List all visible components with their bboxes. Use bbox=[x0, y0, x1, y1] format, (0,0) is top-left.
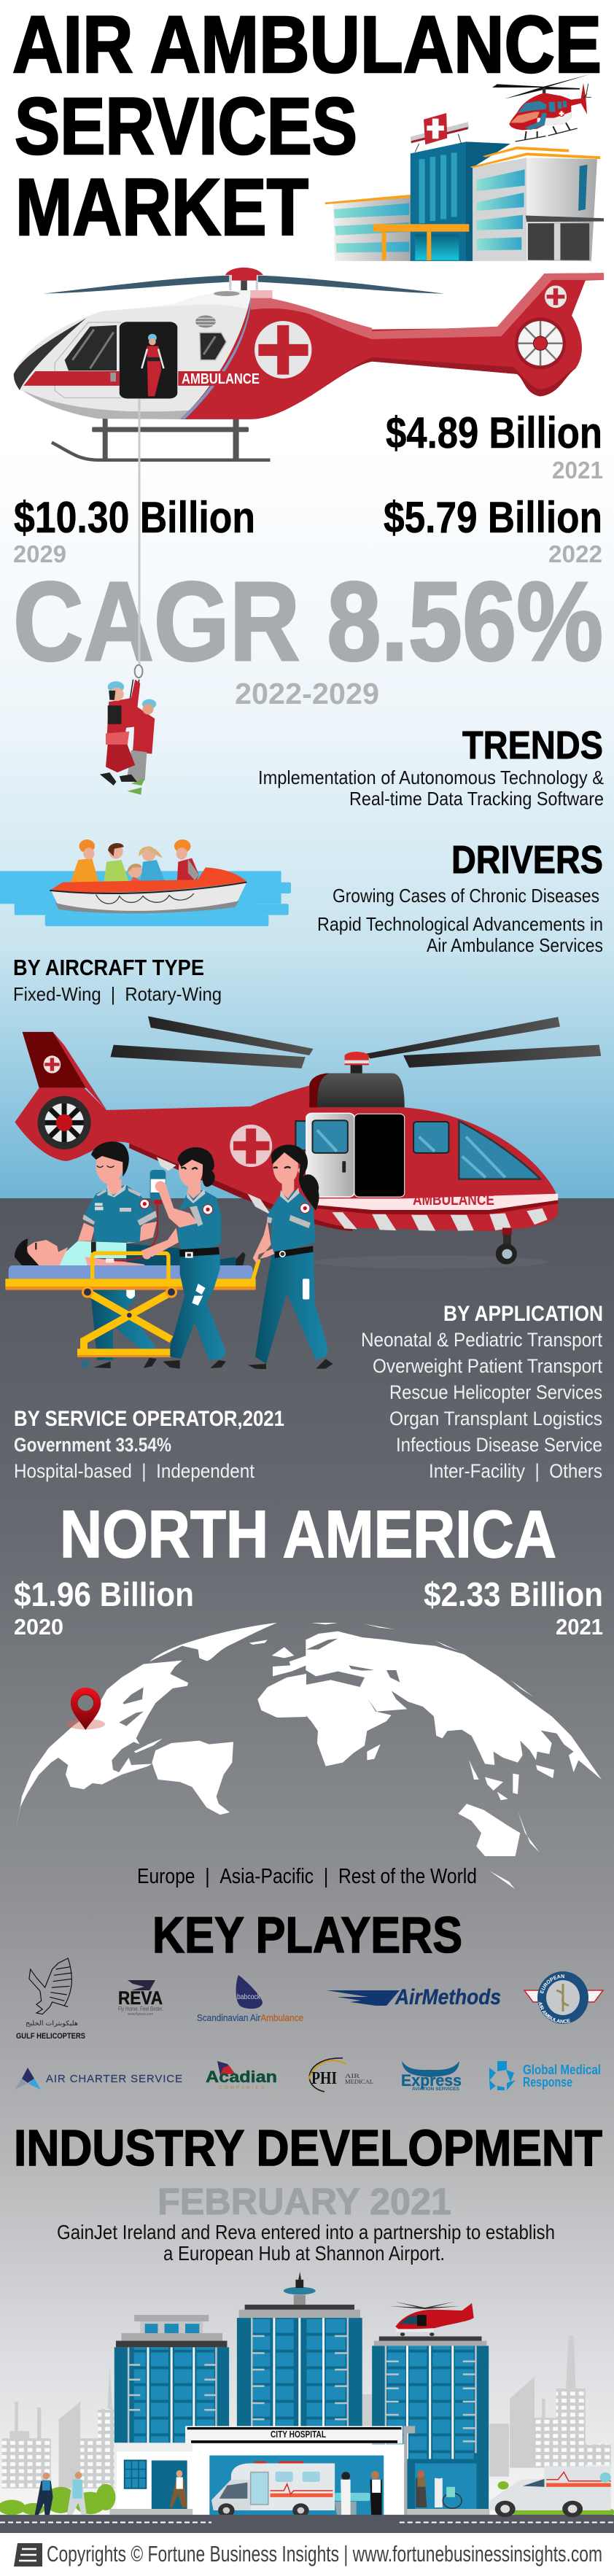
regions list: Europe | Asia-Pacific | Rest of the World bbox=[137, 1865, 477, 1888]
logo: air methods: AirMethods bbox=[395, 1985, 501, 2009]
north america 2020 value: $1.96 Billion bbox=[14, 1575, 194, 1613]
CAGR period: 2022-2029 bbox=[235, 677, 379, 710]
logo: express aviation services bbox=[401, 2061, 462, 2092]
map: new zealand bbox=[489, 1871, 515, 1889]
by aircraft type: BY AIRCRAFT TYPE bbox=[13, 955, 204, 980]
illustration: city hospital scene bbox=[0, 2272, 614, 2533]
development date: FEBRUARY 2021 bbox=[158, 2181, 451, 2222]
north america 2021 value bbox=[424, 1575, 603, 1640]
logo: acadian companies: COMPANIES bbox=[219, 2085, 265, 2090]
background: dark ground to white gradient bbox=[0, 1198, 614, 2576]
world map bbox=[15, 1623, 602, 1889]
logo: reva: REVA bbox=[118, 1988, 163, 2009]
logo: babcock: babcock bbox=[237, 1993, 261, 2001]
logo: global medical response bbox=[489, 2061, 601, 2090]
footer band bbox=[0, 2533, 614, 2576]
logo: reva bbox=[118, 1980, 163, 2017]
icon: hospital building bbox=[325, 113, 604, 261]
icon: large red helicopter bbox=[14, 268, 604, 460]
drivers text bbox=[317, 885, 603, 956]
logo: babcock bbox=[197, 1975, 303, 2023]
stretcher bbox=[9, 1265, 253, 1279]
logo: acadian companies bbox=[206, 2061, 277, 2090]
stat: 2021 value bbox=[386, 408, 603, 484]
helicopter side label: AMBULANCE bbox=[182, 371, 260, 387]
icon: grounded red helicopter bbox=[15, 1016, 601, 1268]
background: white to sky blue gradient bbox=[0, 0, 614, 1198]
by application bbox=[361, 1302, 603, 1482]
patient bbox=[27, 1240, 68, 1265]
logo: air methods bbox=[327, 1985, 501, 2009]
logo: phi air medical bbox=[308, 2058, 373, 2092]
trends text bbox=[258, 767, 604, 810]
icon: location pin bbox=[66, 1688, 105, 1730]
logo: european air ambulance: AIR AMBULANCE bbox=[538, 2002, 570, 2023]
paramedic two bbox=[170, 1252, 226, 1360]
logo: express aviation services: Express bbox=[401, 2071, 462, 2090]
logo: air charter service bbox=[15, 2068, 182, 2090]
stat: 2029 value: 2029 bbox=[13, 540, 66, 567]
logo: express aviation services: AVIATION SERVICES bbox=[412, 2087, 459, 2092]
stat: 2022 value bbox=[384, 493, 602, 567]
logo: acadian companies: Acadian bbox=[206, 2068, 277, 2086]
logo: reva: www.flyreva.com bbox=[128, 2012, 153, 2017]
north america 2020 value bbox=[14, 1575, 194, 1640]
stat: 2022 value: 2022 bbox=[548, 540, 602, 567]
logo: phi air medical: PHI bbox=[311, 2069, 337, 2088]
development description: a European Hub at Shannon Airport. bbox=[163, 2242, 445, 2265]
by service operator: Government 33.54% bbox=[14, 1434, 171, 1456]
iv bag bbox=[150, 1170, 166, 1200]
development description bbox=[57, 2221, 555, 2265]
logo: european air ambulance bbox=[524, 1971, 604, 2024]
title: MARKET bbox=[15, 163, 308, 252]
illustration: paramedics with stretcher bbox=[5, 1141, 333, 1369]
icon: rescue rope and rescuers bbox=[100, 399, 156, 795]
by service operator: BY SERVICE OPERATOR,2021 bbox=[14, 1407, 284, 1431]
by service operator bbox=[14, 1407, 284, 1482]
logo: global medical response: Response bbox=[523, 2075, 572, 2090]
key players heading: KEY PLAYERS bbox=[152, 1906, 462, 1963]
paramedic three bbox=[255, 1252, 328, 1364]
logo: gulf helicopters: GULF HELICOPTERS bbox=[16, 2032, 85, 2041]
north america 2021 value: $2.33 Billion bbox=[424, 1575, 603, 1613]
by aircraft type: Fixed-Wing | Rotary-Wing bbox=[13, 983, 222, 1005]
north america 2020 value: 2020 bbox=[14, 1614, 63, 1640]
map: europe asia africa oceania bbox=[306, 1623, 602, 1856]
logo: reva: Fly Home. Feel Better. bbox=[118, 2006, 163, 2012]
by service operator: Hospital-based | Independent bbox=[14, 1460, 254, 1482]
map: americas and greenland bbox=[15, 1623, 306, 1834]
footer logo bbox=[14, 2543, 42, 2567]
stat: 2029 value: $10.30 Billion bbox=[14, 493, 255, 542]
logo: gulf helicopters bbox=[16, 1958, 85, 2041]
north america 2021 value: 2021 bbox=[556, 1614, 603, 1640]
paramedic one legs bbox=[90, 1289, 155, 1360]
by aircraft type bbox=[13, 955, 222, 1005]
logo: phi air medical: MEDICAL bbox=[345, 2079, 373, 2085]
title: SERVICES bbox=[15, 82, 357, 171]
logo: european air ambulance: EUROPEAN bbox=[540, 1974, 564, 1994]
logo: phi air medical: AIR bbox=[345, 2073, 360, 2079]
icon: small helicopter bbox=[492, 74, 591, 141]
logo: global medical response: Global Medical bbox=[523, 2063, 601, 2077]
helicopter door label: AMBULANCE bbox=[413, 1192, 494, 1209]
logo: gulf helicopters: هليكوبترات الخليج bbox=[26, 2020, 78, 2027]
logo: babcock: Scandinavian AirAmbulance bbox=[197, 2012, 303, 2023]
city hospital sign: CITY HOSPITAL bbox=[271, 2429, 326, 2440]
title bbox=[12, 0, 602, 252]
icon: rescue boat bbox=[0, 839, 291, 926]
stat: 2029 value bbox=[13, 493, 255, 567]
logo: air charter service: AIR CHARTER SERVICE bbox=[46, 2073, 182, 2085]
paramedic one torso bbox=[78, 1222, 157, 1244]
stat: 2021 value: 2021 bbox=[552, 457, 603, 484]
north america heading: NORTH AMERICA bbox=[60, 1497, 556, 1572]
